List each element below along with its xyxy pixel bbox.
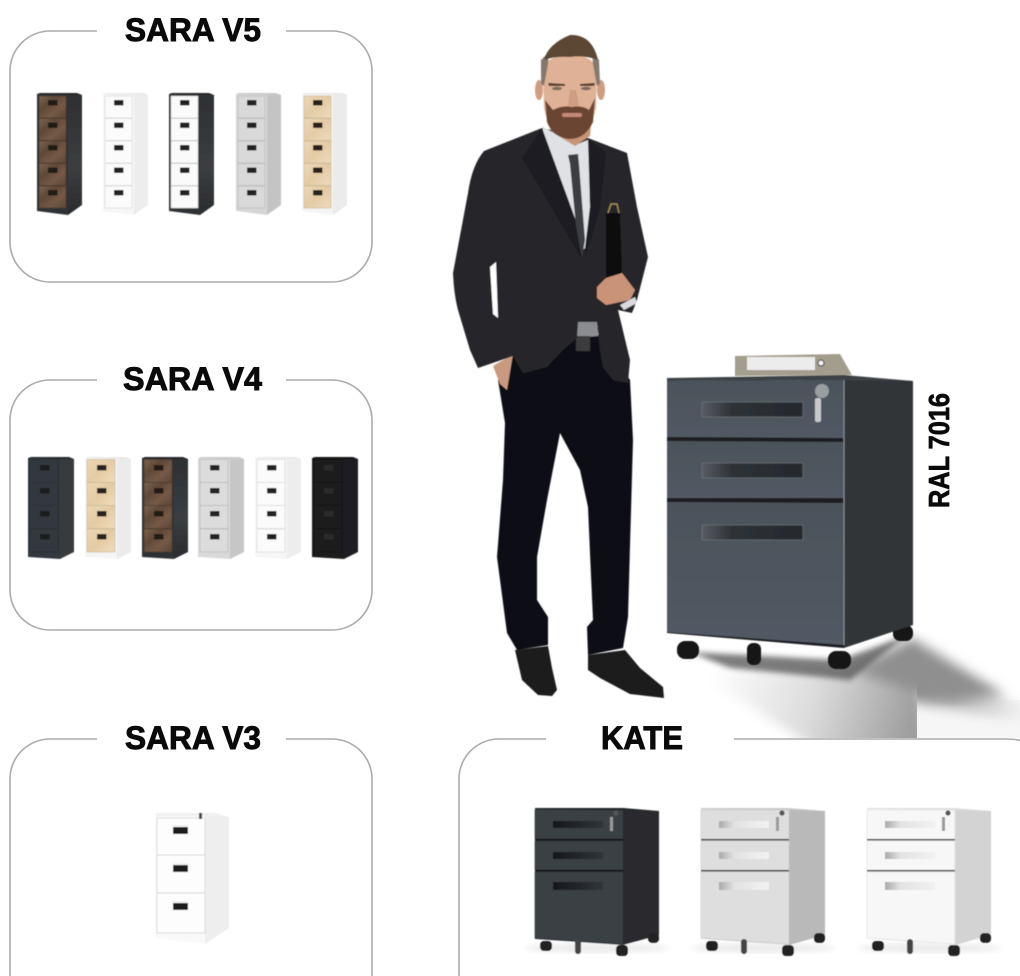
cabinets: SARA V4 — [28, 457, 358, 559]
drawer 2 — [667, 441, 844, 498]
cabinet top — [667, 375, 913, 381]
right lapel — [585, 140, 606, 258]
panel: SARA V3 frame — [10, 739, 372, 976]
floor shadow — [696, 632, 1020, 738]
binder on top — [735, 354, 852, 376]
shirt and belt — [576, 320, 598, 338]
cabinet: light grey — [198, 457, 244, 559]
wheels — [677, 625, 913, 669]
handles — [702, 402, 803, 540]
right grey sideburn — [592, 52, 600, 86]
cabinet front — [667, 380, 844, 648]
beard — [545, 98, 595, 139]
heading: KATE: KATE — [601, 720, 683, 756]
left lapel — [522, 128, 583, 258]
cabinet: anthracite — [28, 457, 74, 559]
front corner highlight — [844, 380, 845, 645]
ears — [535, 80, 543, 100]
cabinet: SARA V3 white — [155, 813, 229, 944]
cabinet: light oak and white — [85, 457, 131, 559]
hair — [544, 35, 598, 60]
gap between arm and torso — [490, 262, 498, 318]
cabinet: white — [255, 457, 301, 559]
cabinets: KATE — [525, 808, 1001, 956]
heading: SARA V5: SARA V5 — [125, 12, 261, 48]
neck — [548, 112, 592, 146]
cabinet: walnut and anthracite — [142, 457, 188, 559]
panel: SARA V5 frame — [10, 31, 372, 282]
briefcase clasp — [608, 204, 619, 213]
panel: KATE frame — [459, 739, 1020, 976]
man in a black suit — [453, 35, 664, 698]
drawer 3 — [667, 502, 844, 645]
cabinet: light oak and white — [302, 93, 347, 215]
holding hand — [597, 273, 635, 305]
heading: SARA V3: SARA V3 — [125, 720, 261, 756]
left shoe — [515, 646, 557, 696]
mouth — [562, 113, 582, 117]
right shoe — [588, 650, 664, 698]
cabinet: KATE anthracite — [525, 808, 669, 956]
cabinet side — [844, 377, 913, 648]
briefcase — [606, 213, 622, 288]
hand in pocket — [493, 354, 513, 390]
cabinet: white — [103, 93, 148, 215]
lock and keys — [815, 384, 829, 422]
cabinet: white and anthracite — [169, 93, 214, 215]
panel: SARA V4 frame — [10, 380, 372, 630]
brows — [548, 83, 595, 86]
eyes — [552, 87, 591, 90]
shirt — [542, 126, 590, 252]
nose shade — [568, 90, 579, 106]
face — [543, 54, 597, 139]
jacket — [453, 128, 648, 383]
shirt cuff — [620, 297, 637, 310]
colour label: RAL 7016 — [924, 393, 956, 508]
tie — [568, 154, 585, 258]
cabinet: KATE white — [857, 808, 1001, 956]
left grey sideburn — [541, 52, 549, 86]
heading: SARA V4: SARA V4 — [123, 361, 262, 397]
cabinet: KATE grey — [691, 808, 835, 956]
belt buckle — [576, 336, 590, 351]
cabinet: light grey — [236, 93, 281, 215]
cabinet: walnut and anthracite — [37, 93, 82, 215]
cabinet: black — [312, 457, 358, 559]
cabinets: SARA V5 — [37, 93, 347, 215]
trousers — [497, 335, 633, 655]
mobile pedestal cabinet RAL 7016 — [667, 354, 913, 669]
drawer 1 — [667, 380, 844, 438]
